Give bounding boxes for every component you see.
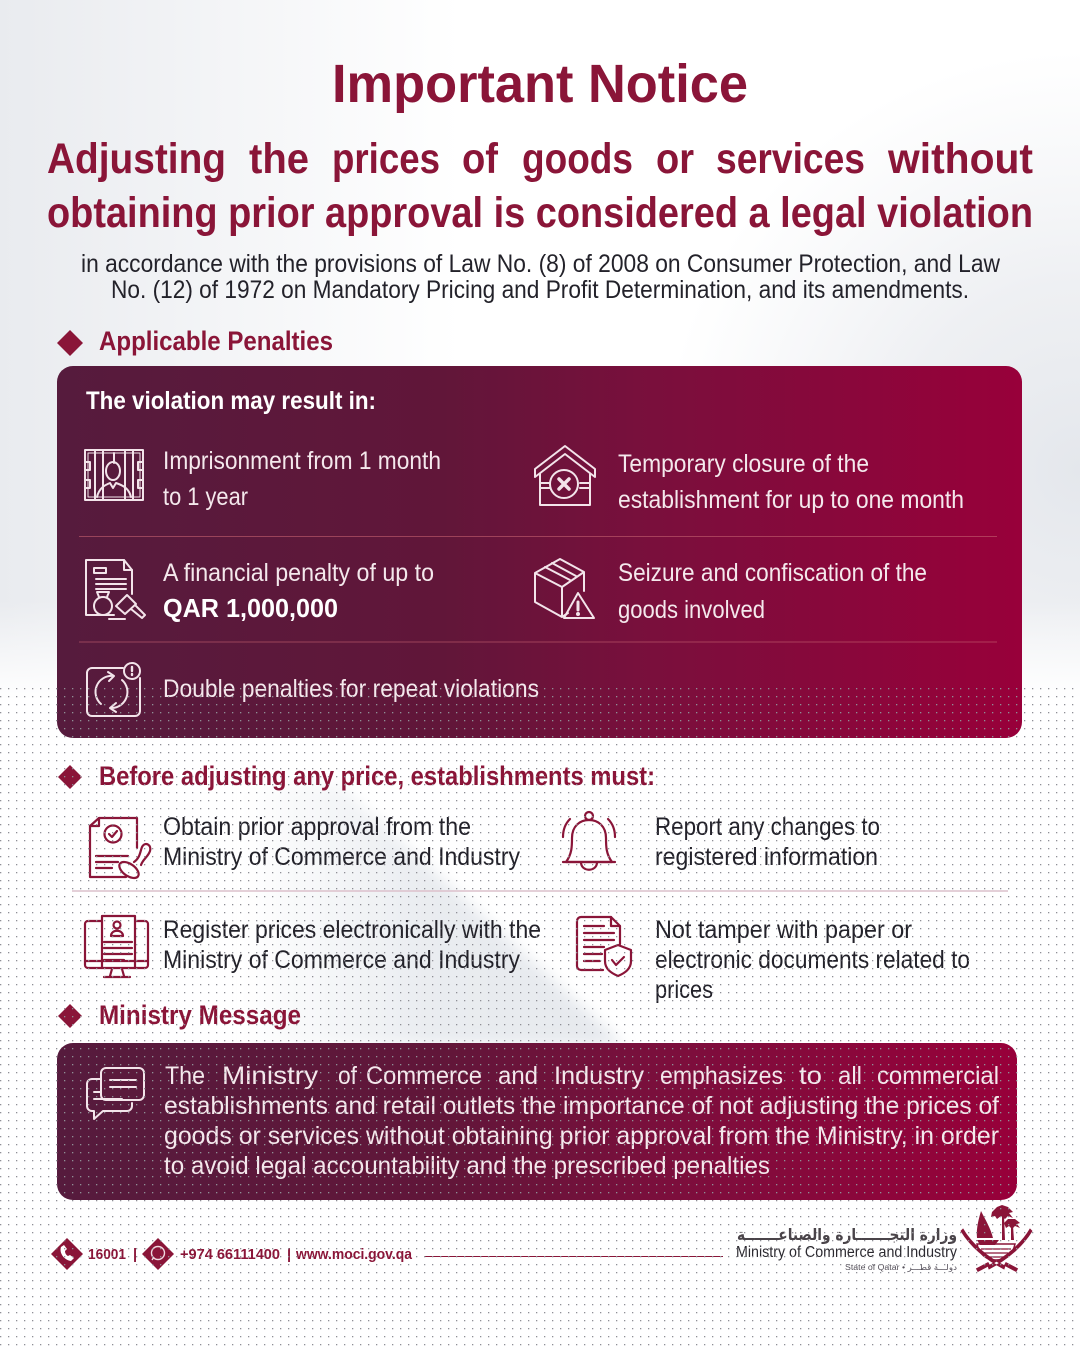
icon: speech bubbles	[87, 1068, 144, 1119]
footer contacts: 16001	[88, 1247, 126, 1263]
text: financial penalty	[163, 559, 434, 623]
headline: Adjusting	[47, 135, 226, 183]
requirement: prior approval: Ministry of Commerce and Industry	[163, 843, 520, 871]
heading: before adjusting: Before adjusting any price, establishments must:	[99, 761, 655, 791]
icon: document shield	[577, 917, 631, 976]
text: imprisonment: to 1 year	[163, 483, 248, 511]
headline: of	[462, 135, 499, 183]
requirement: documents: Not tamper with paper or	[655, 916, 912, 944]
requirement: register prices: Register prices electronically with the	[163, 916, 541, 944]
heading: applicable penalties: Applicable Penalties	[99, 326, 333, 356]
requirement: prior approval: Obtain prior approval from the	[163, 813, 471, 841]
message text: to avoid legal accountability and the prescribed penalties	[164, 1152, 770, 1180]
panel heading: The violation may result in:	[86, 387, 376, 415]
requirement: register prices	[85, 916, 541, 977]
text: imprisonment	[163, 447, 441, 511]
message text: to	[799, 1062, 822, 1090]
message text: The	[165, 1062, 205, 1090]
message text: establishments and retail outlets the importance of not adjusting the prices of	[164, 1092, 999, 1120]
headline	[47, 135, 1033, 237]
footer contacts: www.moci.gov.qa	[295, 1247, 413, 1263]
logo wordmark: Ministry of Commerce and Industry	[736, 1244, 957, 1261]
icon: whatsapp	[142, 1238, 174, 1270]
logo emblem	[961, 1205, 1032, 1272]
icon: bell	[563, 812, 615, 870]
footer contacts: +974 66111400	[180, 1247, 280, 1263]
headline: services	[716, 135, 865, 183]
icon: phone	[51, 1238, 83, 1270]
message text: Commerce	[366, 1062, 482, 1090]
text: closure: establishment for up to one month	[618, 486, 964, 514]
icon: financial penalty	[86, 560, 145, 619]
requirement: report changes: registered information	[655, 843, 878, 871]
text: financial penalty: A financial penalty of up to	[163, 559, 434, 587]
text: closure	[618, 450, 964, 514]
message text: goods or services without obtaining prior approval from the Ministry, in order	[164, 1122, 999, 1150]
requirement: prior approval	[90, 813, 520, 881]
headline: goods	[522, 135, 633, 183]
text: seizure	[618, 559, 927, 624]
headline: the	[249, 135, 309, 183]
headline: or	[656, 135, 694, 183]
message text: Ministry	[222, 1062, 319, 1090]
icon: prison	[85, 450, 143, 500]
requirement: documents	[577, 916, 970, 1004]
message text: of	[338, 1062, 357, 1090]
title: Important Notice	[332, 54, 748, 114]
legal basis text: in accordance with the provisions of Law No. (8) of 2008 on Consumer Protection, and Law	[81, 250, 1001, 278]
message text: all	[838, 1062, 862, 1090]
footer contacts	[51, 1238, 413, 1270]
text: closure: Temporary closure of the	[618, 450, 869, 478]
requirement: report changes	[563, 812, 880, 871]
logo wordmark: State of Qatar • دولـــة قطـــر	[845, 1263, 957, 1272]
text: seizure: Seizure and confiscation of the	[618, 559, 927, 587]
halftone dots overlay	[0, 688, 1080, 1350]
icon: stamped document	[90, 818, 150, 881]
message text: commercial	[877, 1062, 999, 1090]
panel: penalties	[57, 366, 1022, 738]
requirement: documents: electronic documents related to	[655, 946, 970, 974]
headline: prices	[332, 135, 440, 183]
message text: and	[498, 1062, 538, 1090]
requirement: report changes: Report any changes to	[655, 813, 880, 841]
icon: monitor	[85, 916, 148, 977]
text: imprisonment: Imprisonment from 1 month	[163, 447, 441, 475]
footer contacts: |	[287, 1247, 291, 1263]
icon: repeat	[87, 663, 140, 716]
footer contacts: |	[133, 1247, 137, 1263]
message text: emphasizes	[660, 1062, 783, 1090]
text: seizure: goods involved	[618, 596, 765, 624]
logo wordmark: وزارة التجـــــــارة والصناعـــــــة	[737, 1225, 957, 1244]
icon: closed house	[535, 446, 595, 505]
icon: box warning	[535, 559, 594, 618]
message text: Industry	[554, 1062, 644, 1090]
message text	[164, 1062, 999, 1180]
requirement: register prices: Ministry of Commerce and Industry	[163, 946, 520, 974]
requirement: documents: prices	[655, 976, 713, 1004]
legal basis text	[81, 250, 1001, 304]
headline: without	[887, 135, 1033, 183]
text: double penalties: Double penalties for repeat violations	[163, 675, 539, 703]
panel: ministry message	[57, 1043, 1017, 1200]
logo wordmark	[736, 1225, 957, 1272]
heading: ministry message: Ministry Message	[99, 1000, 301, 1030]
text: financial penalty: QAR 1,000,000	[163, 593, 338, 623]
legal basis text: No. (12) of 1972 on Mandatory Pricing and Profit Determination, and its amendments.	[111, 276, 969, 304]
